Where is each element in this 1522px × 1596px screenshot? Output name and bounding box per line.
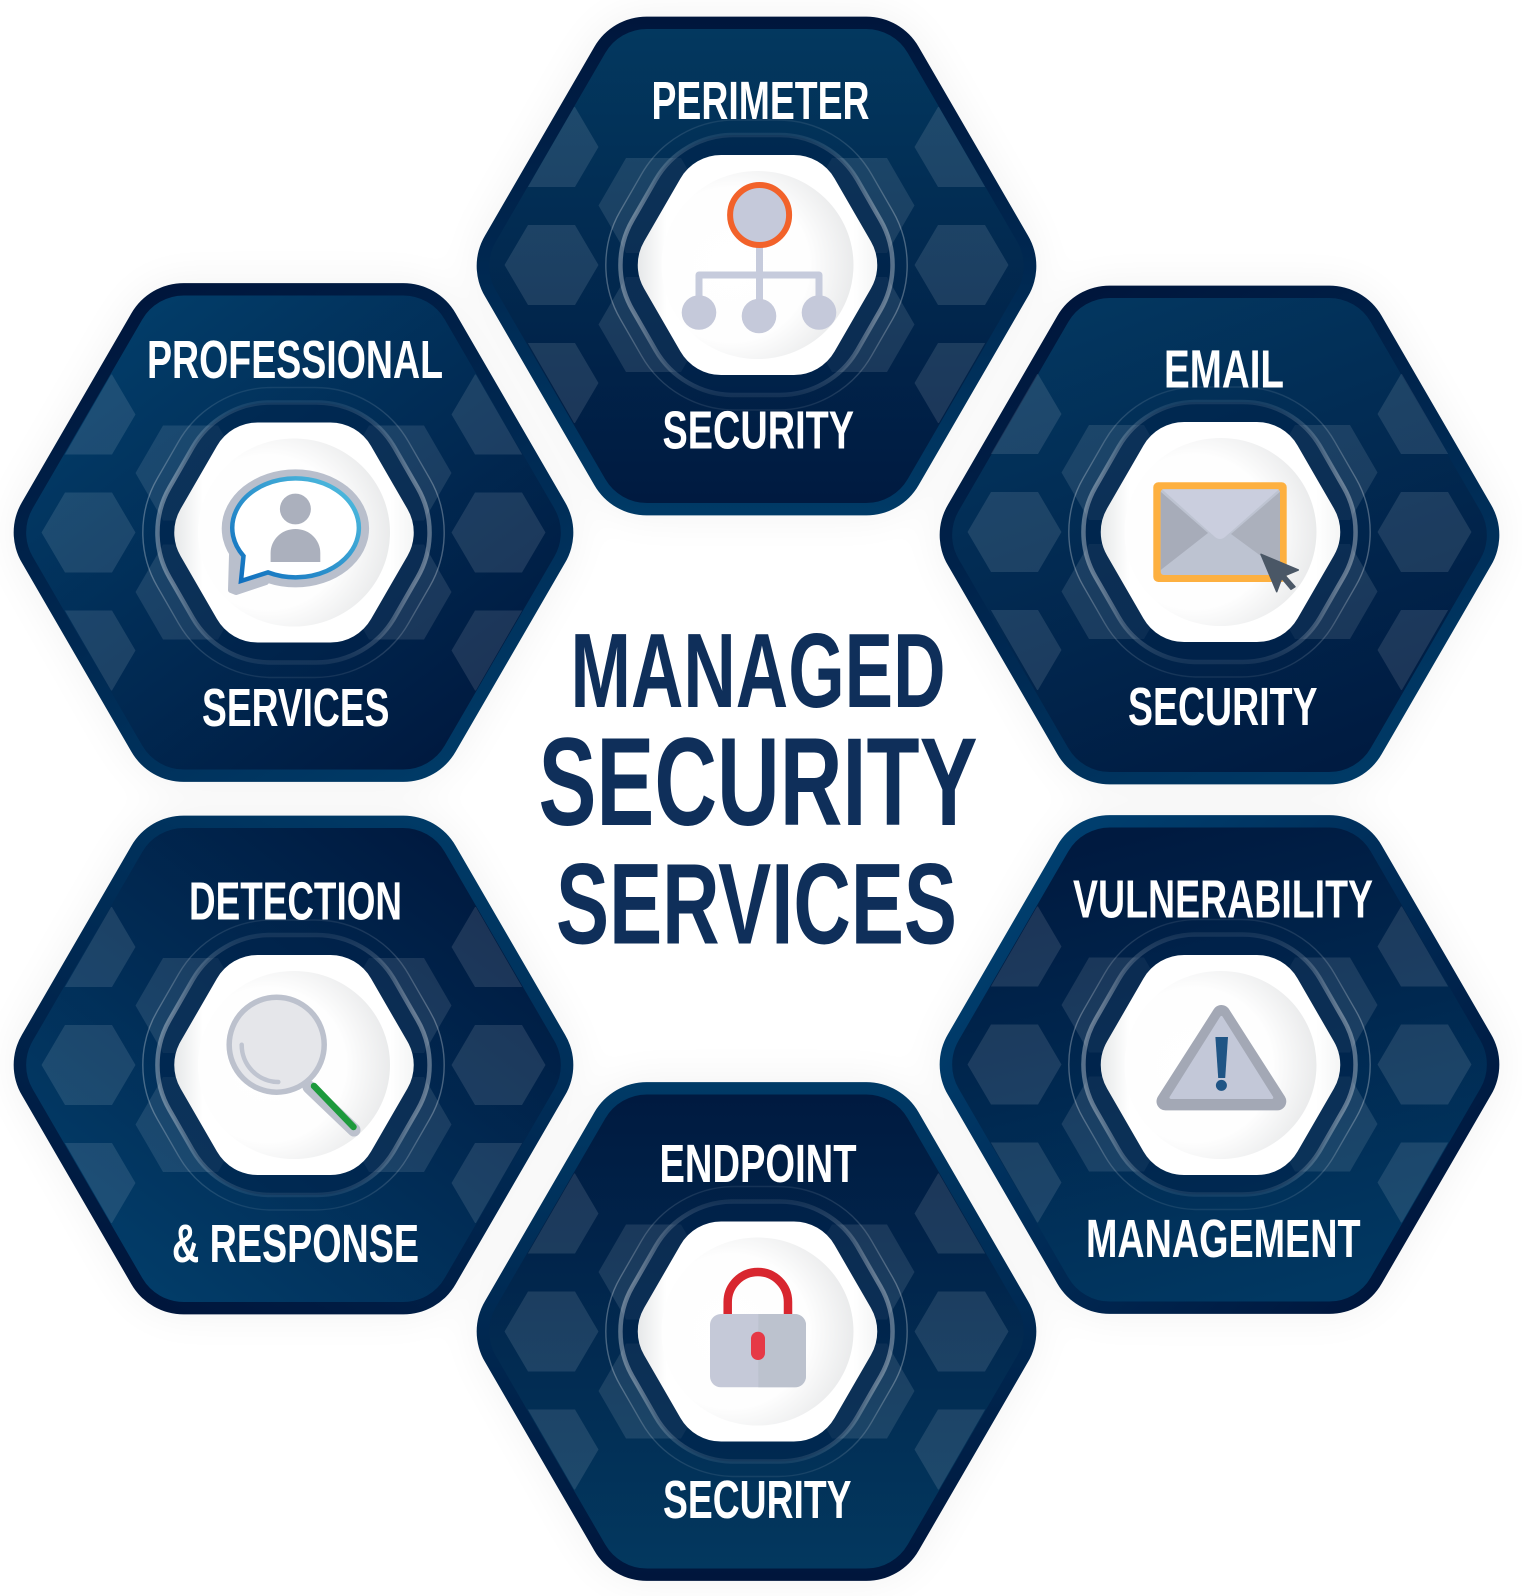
panel: endpoint security: [477, 1082, 1036, 1581]
icon: padlock: [710, 1272, 806, 1387]
hexagon base: perimeter: [477, 17, 1036, 515]
label: and response: & RESPONSE: [172, 1214, 419, 1274]
hexagon base: email: [940, 286, 1499, 784]
label: security: SECURITY: [662, 400, 854, 460]
panel: vulnerability management: [940, 815, 1499, 1314]
label: vulnerability: VULNERABILITY: [1073, 870, 1373, 930]
label: services: SERVICES: [202, 678, 390, 738]
label: perimeter: PERIMETER: [652, 71, 870, 131]
label: email: EMAIL: [1164, 340, 1284, 400]
hexagon base: detection: [14, 816, 573, 1314]
icon: network hierarchy: [682, 185, 836, 333]
panel: email security: [940, 286, 1499, 784]
icon: envelope with cursor: [1153, 482, 1298, 592]
label: detection: DETECTION: [189, 872, 402, 932]
label: professional: PROFESSIONAL: [147, 330, 443, 390]
hexagon base: vulnerability: [940, 815, 1499, 1314]
panel: perimeter security: [477, 17, 1036, 515]
icon: warning triangle: [1166, 1014, 1277, 1101]
title: managed security services: [538, 612, 978, 968]
title: managed security services: SERVICES: [556, 840, 957, 968]
panel: detection and response: [14, 816, 573, 1314]
icon: speech bubble with person: [222, 469, 369, 592]
title: managed security services: SECURITY: [538, 713, 978, 852]
label: security: SECURITY: [663, 1470, 852, 1530]
hexagon base: professional: [14, 283, 573, 782]
title: managed security services: MANAGED: [570, 612, 946, 730]
icon: magnifying glass: [229, 997, 354, 1130]
panel: professional services: [14, 283, 573, 782]
label: security: SECURITY: [1128, 677, 1318, 737]
label: management: MANAGEMENT: [1086, 1209, 1361, 1269]
label: endpoint: ENDPOINT: [660, 1134, 857, 1194]
hexagon base: endpoint: [477, 1082, 1036, 1581]
